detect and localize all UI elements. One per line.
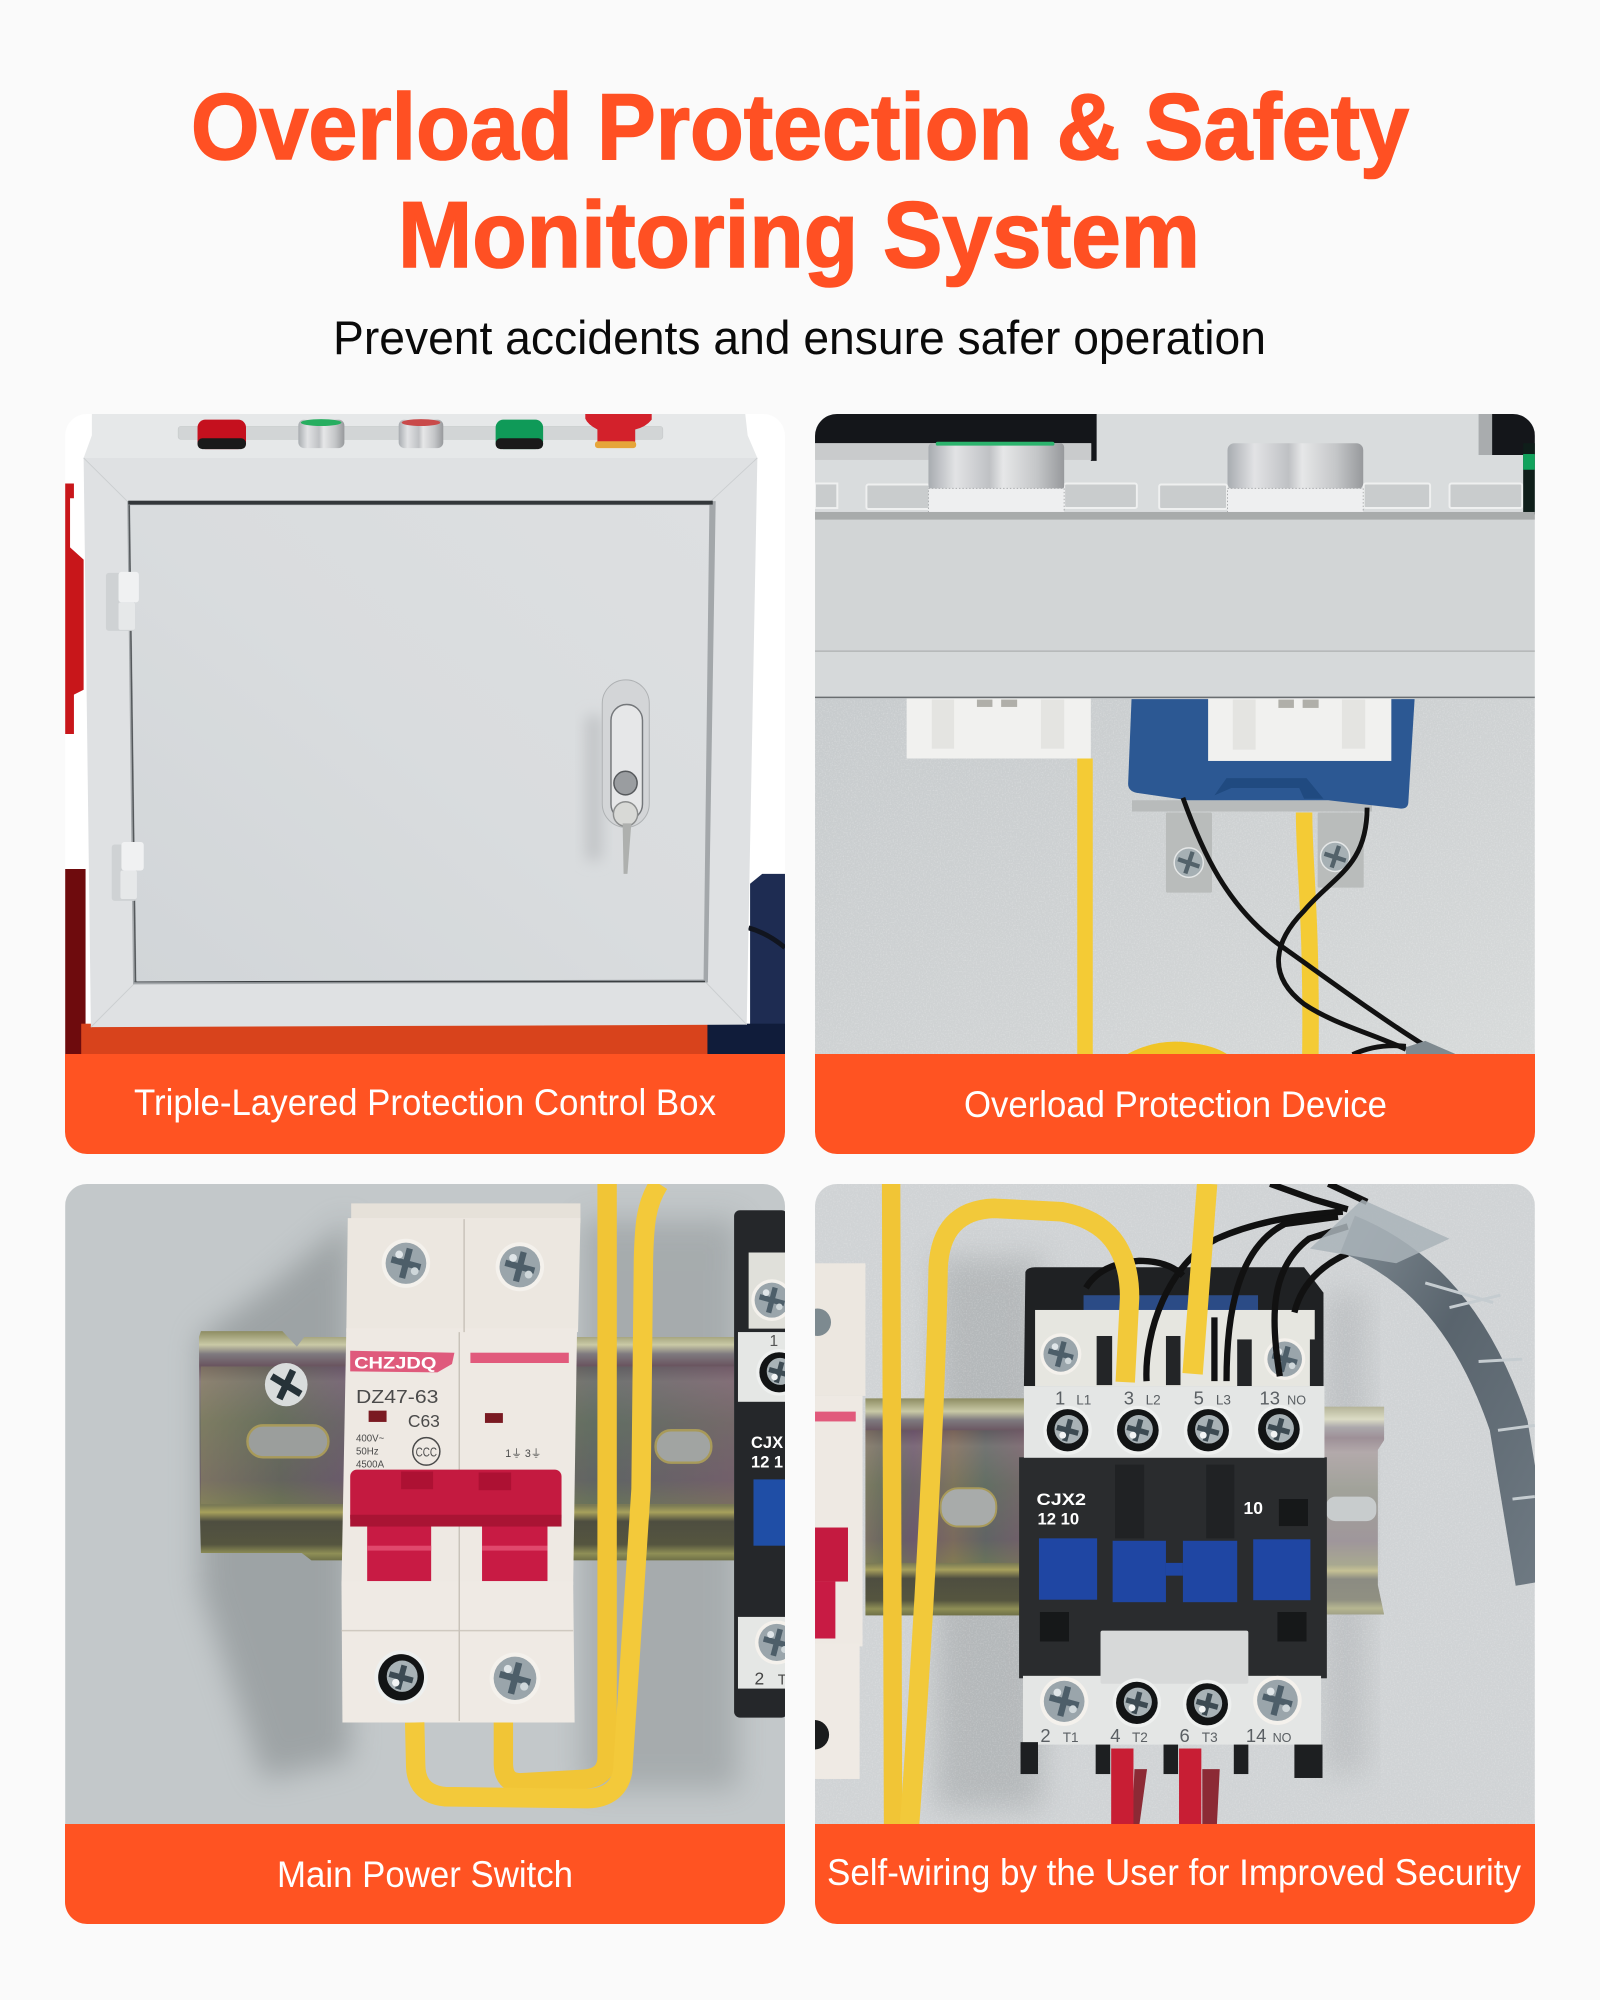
caption: Triple-Layered Protection Control Box [134, 1082, 716, 1123]
black wires [1183, 798, 1423, 1044]
contactor at right: CJX [751, 1433, 783, 1452]
door [130, 505, 709, 981]
wall speckle [815, 1184, 1535, 1827]
orange base [81, 1024, 707, 1056]
subtitle: Prevent accidents and ensure safer operation [333, 311, 1266, 364]
title: Overload Protection & Safety [191, 74, 1409, 179]
lock handle [585, 680, 649, 874]
caption bar [815, 1824, 1535, 1924]
caption bar [65, 1824, 785, 1924]
blue device [1128, 699, 1415, 812]
panel: self-wiring contactor [800, 1184, 1535, 1924]
wall [815, 695, 1535, 1056]
bottom terminals: 6 [1180, 1725, 1190, 1746]
breaker label: 4500A [356, 1460, 385, 1471]
contactor model text: CJX2 [1037, 1490, 1086, 1509]
navy motor at right [750, 874, 785, 1024]
photo: overload device [815, 414, 1535, 1056]
title: Monitoring System [398, 182, 1200, 287]
red pump parts at left [65, 483, 84, 734]
blue contact covers [1039, 1538, 1310, 1602]
top terminal labels and screws: 13 [1259, 1388, 1280, 1409]
yellow wires [415, 1184, 659, 1799]
bottom terminals: 14 [1246, 1725, 1266, 1746]
upper top plate [815, 414, 1535, 519]
top terminal labels and screws: L1 [1076, 1393, 1091, 1408]
soft shadows [200, 1219, 350, 1779]
top terminal labels and screws: L2 [1146, 1393, 1161, 1408]
grey label plate [1101, 1631, 1248, 1684]
DIN rail [865, 1398, 1384, 1615]
box top surface [84, 414, 757, 458]
bottom terminals: NO [1273, 1731, 1292, 1745]
adjacent breaker [800, 1263, 865, 1779]
top terminal labels and screws [1043, 1388, 1306, 1455]
breaker red handles [350, 1470, 562, 1581]
panel: main power switch [65, 1184, 802, 1924]
red wires [1111, 1749, 1220, 1827]
breaker label: 50Hz [356, 1446, 379, 1457]
box front frame [84, 458, 757, 1027]
wall [65, 1184, 785, 1827]
caption bar [65, 1054, 785, 1154]
bottom terminals: T2 [1132, 1730, 1148, 1745]
photo: control box [65, 414, 785, 1057]
yellow wires [891, 1184, 1207, 1826]
caption: Self-wiring by the User for Improved Security [827, 1852, 1521, 1893]
contactor at right: 12 1 [751, 1453, 783, 1472]
brackets [1166, 813, 1364, 893]
buttons row [178, 414, 663, 449]
top terminal labels and screws: 1 [1055, 1388, 1065, 1409]
photo: circuit breaker [65, 1184, 802, 1827]
title [191, 74, 1409, 287]
photo: contactor [800, 1184, 1535, 1827]
breaker label: DZ47-63 [356, 1386, 438, 1407]
breaker label: CCC [416, 1445, 437, 1459]
plastic frames [815, 483, 1522, 509]
caption: Overload Protection Device [964, 1084, 1387, 1125]
soft shadow [936, 1258, 1042, 1808]
caption bar [815, 1054, 1535, 1154]
caption: Main Power Switch [277, 1854, 573, 1895]
contactor model text: 12 10 [1038, 1509, 1079, 1529]
contactor model text: 10 [1244, 1498, 1263, 1518]
contactor at right: T [778, 1673, 787, 1689]
black wires [1086, 1184, 1367, 1381]
contactor at right [734, 1210, 802, 1718]
breaker label [350, 1351, 569, 1471]
bottom terminals: 2 [1040, 1725, 1051, 1746]
bottom terminals: 4 [1110, 1725, 1120, 1746]
contactor body [1019, 1267, 1327, 1778]
bottom terminals [1040, 1676, 1302, 1746]
breaker body [341, 1203, 580, 1722]
contactor at right: 2 [754, 1669, 764, 1689]
contactor model text [1037, 1490, 1263, 1529]
bottom terminals: T3 [1202, 1730, 1218, 1745]
breaker label: C63 [408, 1411, 440, 1431]
white block left [907, 699, 1091, 759]
top terminal labels and screws: L3 [1216, 1393, 1231, 1408]
silver buttons [928, 442, 1535, 516]
breaker label: CHZJDQ [354, 1354, 436, 1372]
door recess [127, 501, 716, 984]
bottom terminals: T1 [1063, 1730, 1079, 1745]
DIN rail [199, 1331, 734, 1560]
yellow wires [1077, 758, 1093, 1054]
panel: control box [65, 414, 785, 1154]
contactor at right: 1 [769, 1333, 778, 1350]
panel: overload device [815, 414, 1535, 1154]
top terminal labels and screws: 3 [1124, 1388, 1134, 1409]
top terminal labels and screws: 5 [1194, 1388, 1204, 1409]
breaker label: 400V~ [356, 1434, 385, 1445]
wall speckle [815, 700, 1535, 1056]
hinges [106, 572, 144, 901]
top terminal labels and screws: NO [1287, 1394, 1306, 1408]
wall [815, 1184, 1535, 1827]
breaker label: 1⏚ 3⏚ [505, 1448, 541, 1460]
spiral wire wrap [1310, 1199, 1535, 1583]
black recess shapes [815, 414, 1097, 461]
enclosure face [815, 512, 1535, 520]
